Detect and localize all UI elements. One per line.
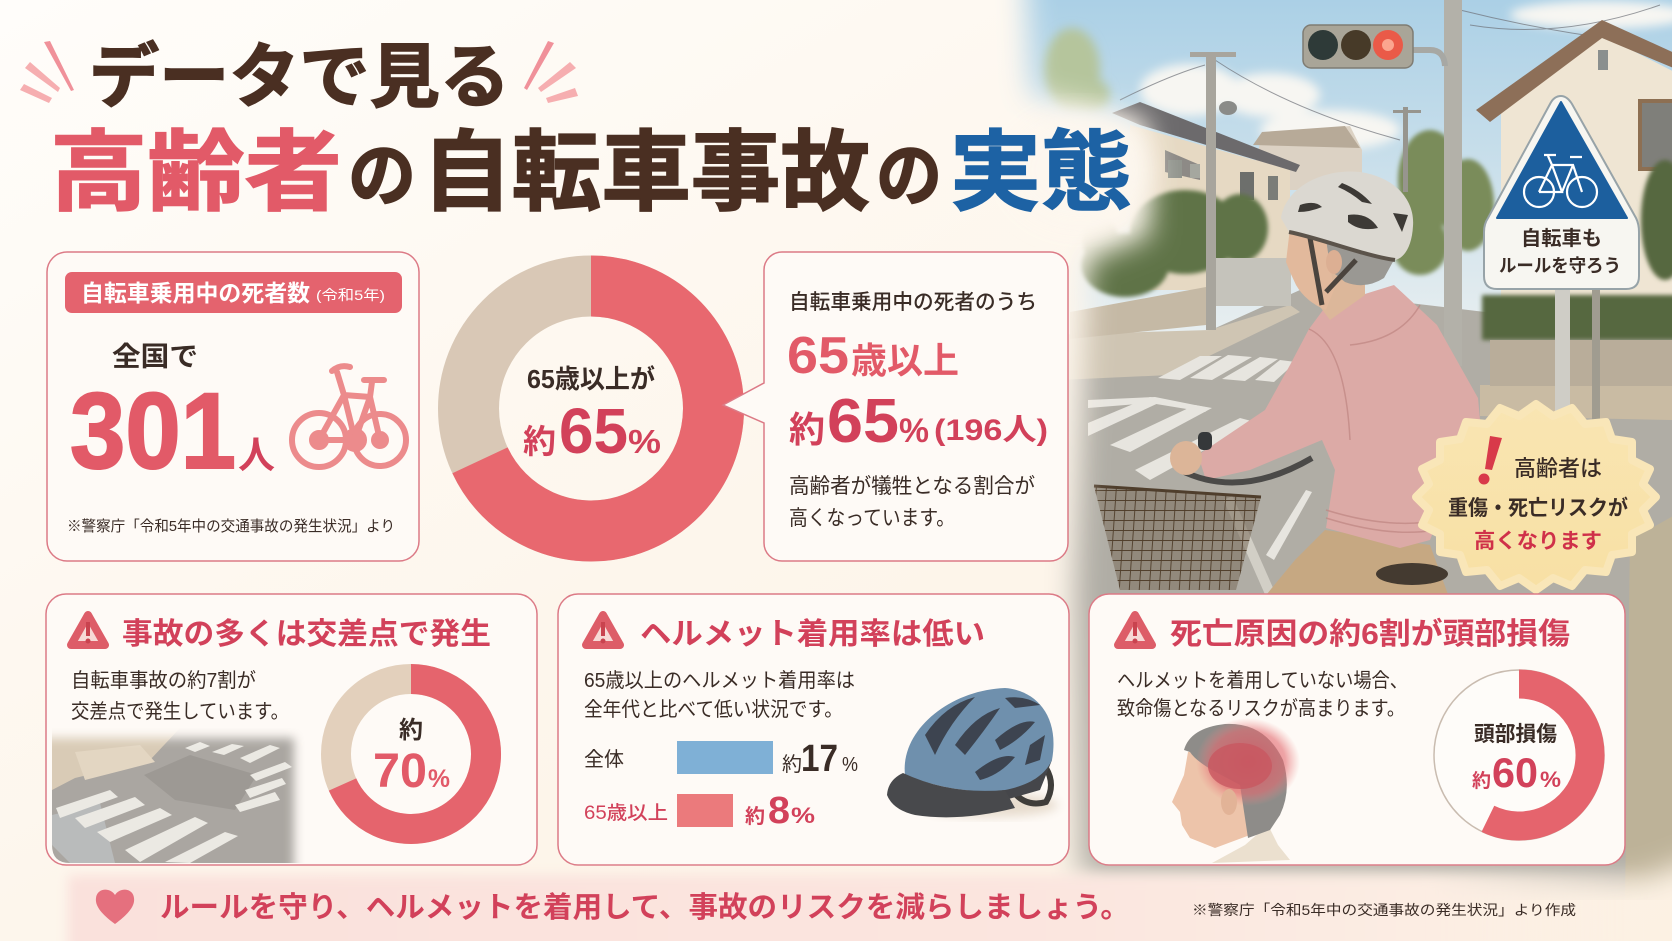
callout percentage	[789, 387, 1048, 456]
bar chart: helmet rate: 全体	[584, 748, 624, 771]
rider hand	[1170, 441, 1202, 475]
donut label: 約	[523, 423, 556, 460]
icon: warning	[71, 615, 105, 645]
panel: intersections	[46, 594, 537, 865]
tree behind main pole	[1392, 130, 1494, 275]
road sign: ride by the rules	[1484, 96, 1639, 289]
callout note	[789, 475, 1035, 530]
signal arm	[1412, 50, 1445, 66]
donut label: %	[1540, 767, 1561, 792]
donut label: %	[428, 765, 450, 793]
rider face	[1286, 234, 1328, 308]
donut label: 約	[399, 717, 423, 744]
donut label: 65歳以上が	[527, 364, 655, 394]
ground and road	[1058, 290, 1672, 895]
sign blue triangle	[1497, 102, 1627, 218]
callout 65 years: 65	[787, 327, 849, 385]
callout 65 years: 歳以上	[851, 340, 959, 381]
donut label: 60	[1492, 749, 1538, 796]
donut label	[523, 364, 661, 467]
illustration: street scene with elderly cyclist	[1009, 0, 1672, 896]
rider's bicycle frame	[1228, 498, 1272, 598]
source note: ※警察庁「令和5年中の交通事故の発生状況」より	[67, 518, 395, 535]
icon: bicycle	[292, 366, 406, 467]
sign text: ルールを守ろう	[1499, 256, 1621, 276]
panel: fatalities count	[47, 252, 419, 561]
panel: head injury	[1089, 594, 1625, 865]
chart: donut 65%	[468, 286, 714, 531]
bar chart: helmet rate: 17	[801, 738, 838, 780]
hedge left	[1081, 190, 1268, 297]
panel text	[71, 669, 289, 723]
garden wall right	[1490, 340, 1672, 386]
rider hair	[1326, 244, 1393, 286]
callout: starburst warning	[1416, 404, 1656, 590]
panel heading: 事故の多くは交差点で発生	[122, 618, 491, 651]
panel text: 自転車事故の約7割が	[71, 669, 256, 692]
panel heading: ヘルメット着用率は低い	[640, 618, 985, 651]
panel text	[584, 669, 855, 721]
callout percentage: 約	[789, 409, 825, 450]
title: 実態: 実態	[950, 123, 1132, 222]
callout percentage: 65	[827, 387, 899, 456]
title: 自転車事故: 自転車事故	[422, 123, 870, 222]
callout note: 高くなっています。	[789, 507, 955, 530]
chart: donut 60%	[1434, 670, 1604, 840]
rider helmet	[1281, 171, 1413, 260]
icon: exclamation	[1478, 436, 1502, 484]
main signal pole	[1444, 0, 1462, 310]
number 301: 301	[70, 370, 236, 491]
panel text: 交差点で発生しています。	[71, 700, 289, 723]
callout note: 高齢者が犠牲となる割合が	[789, 475, 1035, 498]
clouds	[1140, 1, 1672, 150]
donut label: 65	[559, 395, 628, 467]
donut label: %	[628, 423, 661, 460]
footer source: ※警察庁「令和5年中の交通事故の発生状況」より作成	[1192, 902, 1576, 918]
bar chart: helmet rate: 約	[782, 753, 802, 776]
panel heading: 死亡原因の約6割が頭部損傷	[1170, 617, 1570, 651]
icon: heart	[96, 890, 134, 924]
nationwide label: 全国で	[112, 342, 198, 372]
rider shirt	[1198, 285, 1480, 548]
overhead wires	[1120, 5, 1660, 140]
panel header: 自転車乗用中の死者数	[81, 280, 310, 306]
sky	[1009, 0, 1672, 332]
distant pole	[1393, 107, 1421, 192]
garden wall left	[1070, 287, 1206, 339]
title: の: の	[876, 137, 942, 215]
burst lines left	[20, 41, 74, 103]
panel header: (令和5年)	[316, 287, 385, 303]
callout percentage: %	[899, 412, 929, 450]
starburst text: 高くなります	[1474, 530, 1602, 553]
title line 2: 高齢者: 高齢者	[50, 123, 342, 222]
panel text	[1117, 669, 1408, 720]
illustration: head injury	[1172, 718, 1300, 863]
callout lead: 自転車乗用中の死者のうち	[789, 291, 1037, 314]
panel text: 全年代と比べて低い状況です。	[584, 698, 843, 721]
helmet strap	[1310, 238, 1356, 305]
starburst text	[1448, 456, 1628, 553]
starburst text: 高齢者は	[1514, 456, 1602, 481]
road sign posts	[1555, 285, 1600, 420]
bicycle basket	[1094, 486, 1261, 590]
bar chart: helmet rate: 65歳以上	[584, 802, 668, 824]
bar chart: helmet rate	[584, 738, 858, 832]
far house	[1253, 126, 1362, 190]
callout 65 years	[787, 327, 959, 385]
crosswalk stripes	[1088, 355, 1312, 560]
illustration: helmet	[887, 688, 1058, 817]
bar chart: helmet rate: 8	[768, 790, 790, 832]
donut label: 頭部損傷	[1474, 723, 1557, 746]
bar chart: helmet rate: %	[791, 803, 815, 828]
sign text	[1499, 227, 1621, 276]
callout percentage: (196人)	[934, 414, 1048, 447]
pale tree	[1044, 28, 1110, 113]
illustration: intersection	[52, 728, 305, 863]
traffic light	[1303, 25, 1413, 68]
donut label: 約	[1472, 770, 1491, 792]
title	[20, 38, 1132, 222]
panel header	[65, 272, 402, 313]
handlebar	[1180, 432, 1312, 482]
rider ear	[1326, 250, 1342, 274]
starburst text: 重傷・死亡リスクが	[1448, 496, 1628, 520]
sidewalk and pavement	[1075, 306, 1300, 379]
burst lines right	[524, 41, 578, 103]
icon: warning	[586, 615, 620, 645]
donut label	[1472, 723, 1561, 796]
donut label: 70	[373, 745, 427, 798]
saddle	[1376, 563, 1448, 585]
panel: helmet usage	[558, 594, 1069, 865]
footer band	[68, 875, 1668, 941]
bar chart: helmet rate: %	[842, 754, 858, 776]
panel text: ヘルメットを着用していない場合、	[1117, 669, 1408, 692]
panel text: 致命傷となるリスクが高まります。	[1117, 697, 1405, 720]
panel: callout over 65	[723, 252, 1068, 561]
panel text: 65歳以上のヘルメット着用率は	[584, 669, 855, 692]
wall beside left house	[1216, 258, 1291, 306]
hedge right	[1482, 160, 1672, 340]
left house	[1112, 102, 1300, 290]
chart: donut 70%	[336, 679, 486, 829]
utility pole	[1190, 52, 1237, 330]
soft cream halo behind title	[1010, 115, 1150, 225]
rider neck	[1320, 273, 1365, 320]
donut label	[373, 717, 450, 798]
right house	[1476, 20, 1672, 300]
title line 1: データで見る	[89, 38, 510, 116]
sign bicycle icon	[1524, 155, 1597, 207]
footer message: ルールを守り、ヘルメットを着用して、事故のリスクを減らしましょう。	[160, 891, 1130, 924]
rider pants	[1268, 530, 1448, 594]
icon: warning	[1118, 615, 1152, 645]
sign text: 自転車も	[1521, 227, 1602, 250]
unit: 人	[238, 435, 275, 476]
title: の: の	[348, 137, 416, 215]
shirt shading	[1309, 305, 1440, 532]
bar chart: helmet rate: 約	[745, 805, 765, 828]
